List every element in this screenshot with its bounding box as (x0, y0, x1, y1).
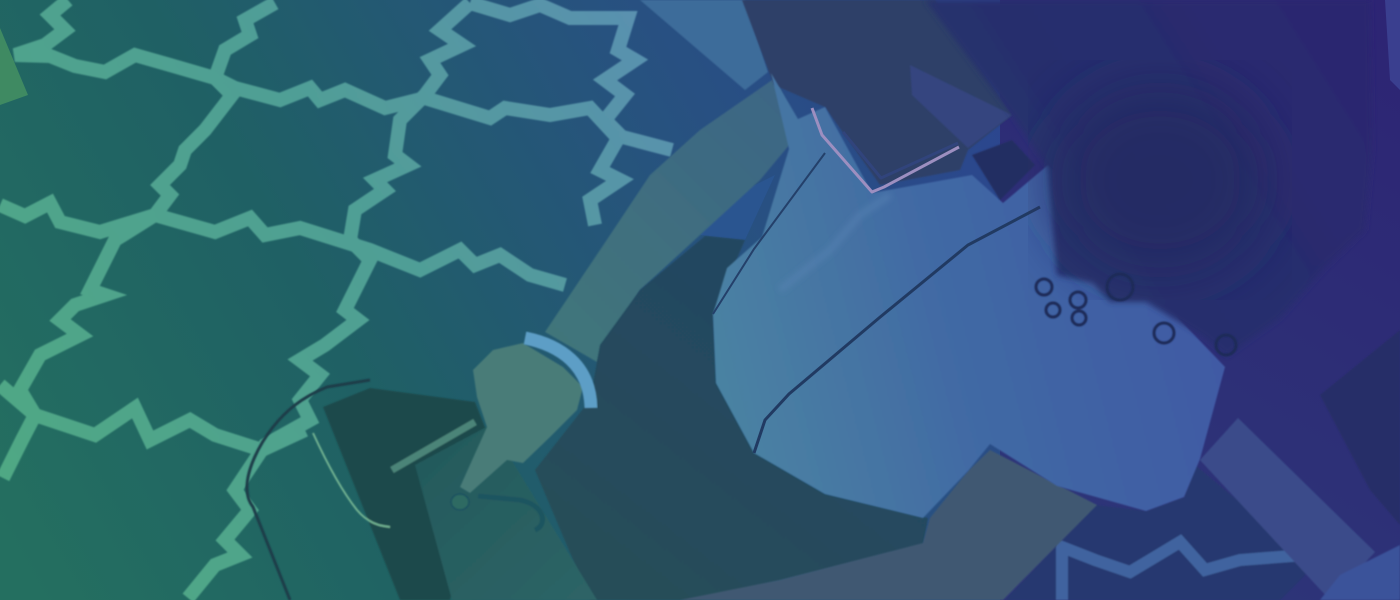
carpet trellis pattern (0, 0, 672, 598)
shirt placket seam (713, 153, 825, 314)
pale wooden strip (1200, 418, 1375, 600)
shirt wrinkles (780, 195, 890, 290)
tablet green wire (313, 433, 390, 527)
shelf rail at top right (1385, 0, 1400, 90)
blue rug patch under arm (700, 175, 775, 240)
hair curls (1036, 274, 1236, 355)
shirt lanyard (754, 207, 1040, 453)
tablet dark frame (323, 388, 490, 600)
wristband (525, 338, 591, 408)
forearm lower right (680, 450, 1097, 600)
shelf corner detail (1320, 545, 1400, 600)
right side room background (1000, 0, 1400, 600)
dark skirt and lap (535, 236, 928, 600)
glasses strap (972, 140, 1035, 200)
tablet (247, 380, 597, 600)
arm reaching to tablet (545, 78, 800, 362)
hair dark core (1050, 80, 1270, 280)
hand pointing (460, 343, 583, 493)
yellow green toy at top left edge (0, 28, 28, 105)
white shirt (713, 73, 1225, 518)
glasses (812, 108, 959, 192)
tablet cord (247, 380, 370, 600)
rug corner at lower right (1005, 465, 1315, 600)
tablet groove (478, 496, 543, 530)
curly hair (925, 0, 1372, 356)
glasses temple band (910, 65, 1012, 148)
face (742, 0, 1012, 185)
tablet stylus highlight (392, 422, 475, 470)
dark cabinet opening (1320, 330, 1400, 525)
tablet board (415, 425, 597, 600)
pale floor patch behind child (640, 0, 768, 90)
tablet button (451, 494, 469, 510)
wooden shelf and room at right (1005, 330, 1400, 600)
rug stripe at lower right (1062, 542, 1305, 600)
